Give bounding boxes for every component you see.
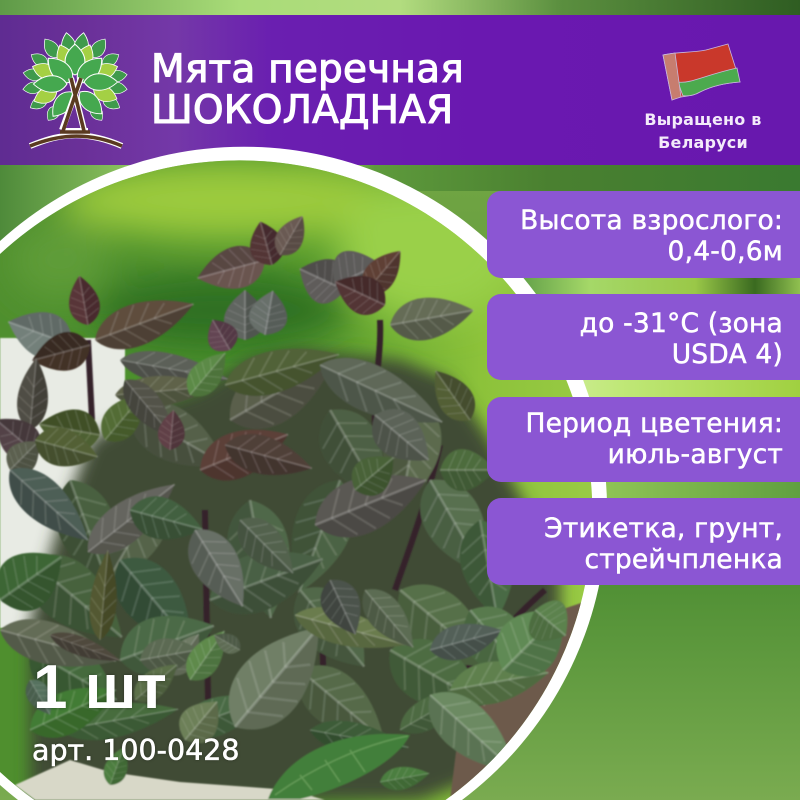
title: ШОКОЛАДНАЯ [151, 88, 453, 133]
flag caption [644, 110, 762, 152]
flag caption: Беларуси [658, 133, 748, 152]
title [151, 47, 464, 133]
panel: package contents [487, 498, 800, 585]
panel: flowering [487, 397, 800, 482]
panel: flowering: Период цветения: [525, 408, 783, 439]
panel: frost hardiness [487, 294, 800, 380]
panel: height: Высота взрослого: [520, 205, 783, 236]
panel: height [487, 191, 800, 278]
circular mint plant photo with white ring [0, 146, 607, 800]
panel: package contents: стрейчпленка [584, 544, 783, 575]
quantity label: 1 шт [33, 653, 167, 722]
icon: tree logo [22, 32, 128, 149]
panel: frost hardiness: USDA 4) [672, 339, 783, 370]
article number: арт. 100-0428 [32, 734, 240, 767]
header band [0, 15, 800, 165]
flag caption: Выращено в [644, 110, 762, 129]
icon: Belarus flag [662, 44, 740, 101]
panel: package contents: Этикетка, грунт, [544, 513, 783, 544]
panel: height: 0,4-0,6м [668, 236, 783, 267]
title: Мята перечная [151, 47, 464, 92]
filler leaves [29, 371, 514, 749]
panel: flowering: июль-август [608, 439, 783, 470]
panel: frost hardiness: до -31°С (зона [580, 308, 783, 339]
main leaves [0, 209, 585, 799]
